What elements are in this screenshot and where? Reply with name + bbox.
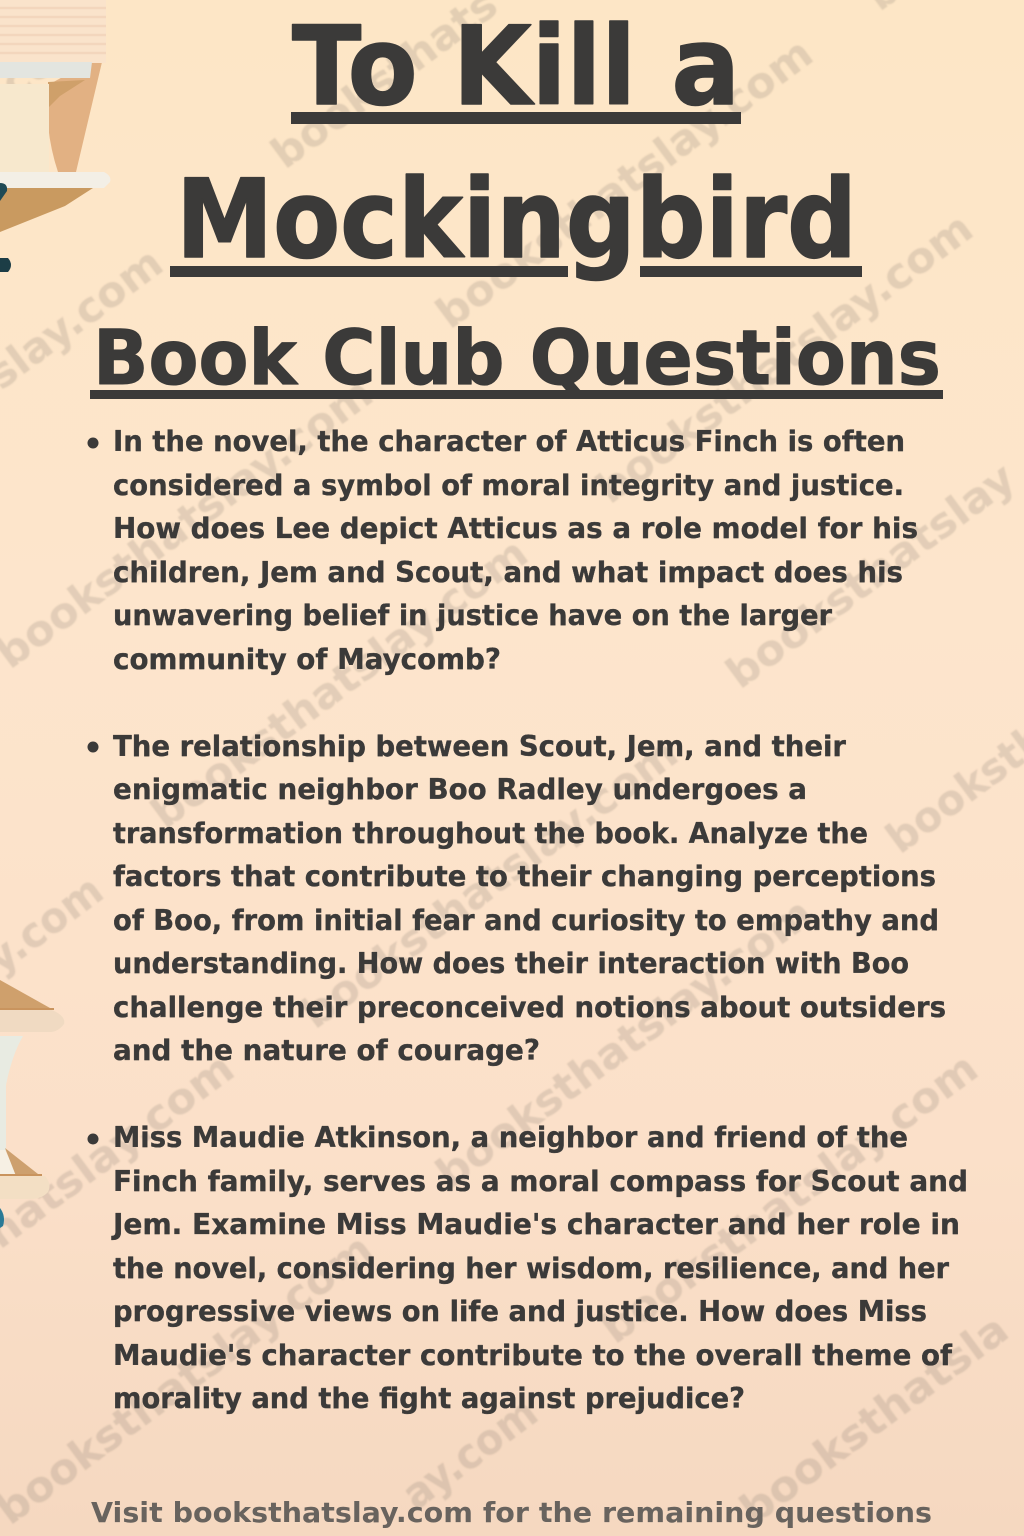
title: To Kill a: To Kill a <box>292 3 740 130</box>
question 3: Maudie's character contribute to the overall theme of <box>113 1339 953 1372</box>
watermarks: booksthatsla <box>731 1304 1017 1534</box>
question 2: challenge their preconceived notions about outsiders <box>113 991 946 1024</box>
question 1: community of Maycomb? <box>113 643 501 676</box>
question 2 <box>88 730 946 1067</box>
question 3: progressive views on life and justice. How does Miss <box>113 1295 927 1328</box>
icon: upper book stack <box>0 0 110 272</box>
question 2: enigmatic neighbor Boo Radley undergoes a <box>113 773 807 806</box>
question 2: transformation throughout the book. Analyze the <box>113 817 868 850</box>
watermarks: booksthatslay.com <box>427 888 822 1198</box>
question 1: considered a symbol of moral integrity and justice. <box>113 469 904 502</box>
watermarks: booksthatslay <box>717 453 1024 698</box>
watermarks: booksthatslay.com <box>292 728 687 1038</box>
watermarks: booksthatslay.com <box>427 28 822 338</box>
question 1: In the novel, the character of Atticus Finch is often <box>113 425 905 458</box>
question 2: understanding. How does their interaction with Boo <box>113 947 909 980</box>
footer call to action: Visit booksthatslay.com for the remaining questions <box>91 1496 932 1529</box>
question 3: Finch family, serves as a moral compass for Scout and <box>113 1165 968 1198</box>
title: Mockingbird: Mockingbird <box>176 156 857 283</box>
question 1: How does Lee depict Atticus as a role model for his <box>113 512 918 545</box>
question 3: Miss Maudie Atkinson, a neighbor and friend of the <box>113 1121 908 1154</box>
watermarks: booksthatslay.com <box>142 528 537 838</box>
question 2: and the nature of courage? <box>113 1034 540 1067</box>
subtitle: Book Club Questions: Book Club Questions <box>93 313 941 402</box>
watermarks: booksthatslay.com <box>592 1043 987 1353</box>
question 1: unwavering belief in justice have on the larger <box>113 599 832 632</box>
question 2: of Boo, from initial fear and curiosity to empathy and <box>113 904 939 937</box>
watermarks: ay.com <box>393 1387 547 1519</box>
watermarks: booksthatslay.com <box>587 203 982 513</box>
question 1: children, Jem and Scout, and what impact does his <box>113 556 903 589</box>
question 3: morality and the fight against prejudice? <box>113 1382 745 1415</box>
question 3: Jem. Examine Miss Maudie's character and her role in <box>111 1208 960 1241</box>
question 2: The relationship between Scout, Jem, and their <box>113 730 846 763</box>
icon: lower book stack <box>0 980 64 1228</box>
question 3: the novel, considering her wisdom, resilience, and her <box>113 1252 949 1285</box>
question 2: factors that contribute to their changing perceptions <box>113 860 936 893</box>
question 3 <box>88 1121 968 1415</box>
question 1 <box>88 425 918 676</box>
